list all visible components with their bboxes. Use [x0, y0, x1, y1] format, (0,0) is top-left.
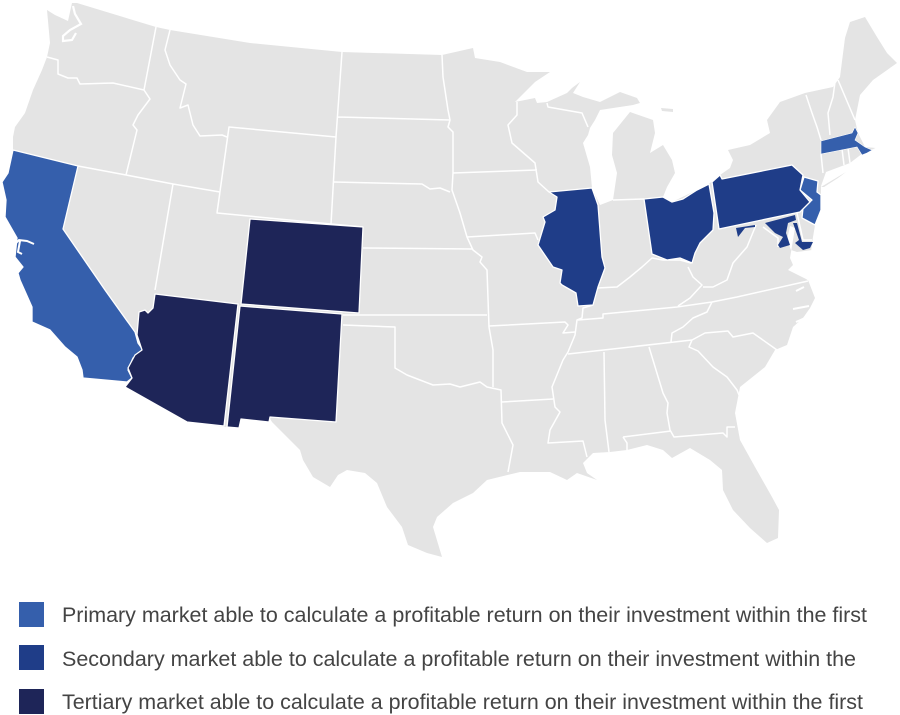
tertiary market: Arizona: [125, 294, 238, 426]
North Carolina sounds: [793, 287, 809, 322]
label: primary: Primary market able to calculate a profitable return on their investment within the first: [62, 604, 867, 627]
secondary market: Illinois: [538, 188, 605, 306]
legend item: secondary market: [19, 645, 856, 671]
legend: [19, 602, 867, 714]
swatch: tertiary: [19, 689, 44, 714]
Long Island: [821, 172, 846, 187]
legend item: tertiary market: [19, 689, 863, 714]
map of the United States: [2, 3, 897, 557]
tertiary market: Colorado: [241, 219, 363, 313]
legend item: primary market: [19, 602, 867, 627]
land silhouette: [2, 3, 897, 557]
swatch: secondary: [19, 645, 44, 670]
Drummond Island: [661, 108, 673, 112]
primary market: New Jersey: [800, 177, 821, 225]
primary market: San Francisco Bay inlet: [14, 240, 34, 254]
state borders: [47, 27, 855, 472]
swatch: primary: [19, 602, 44, 627]
secondary market: Maryland: [736, 215, 813, 250]
primary market: California: [2, 150, 143, 382]
label: tertiary: Tertiary market able to calculate a profitable return on their investment within the first: [62, 691, 863, 714]
secondary market: Ohio: [644, 184, 714, 263]
label: secondary: Secondary market able to calculate a profitable return on their investment within the: [62, 648, 856, 671]
Puget Sound inlet: [63, 6, 81, 41]
secondary market: Pennsylvania: [712, 165, 810, 229]
tertiary market: New Mexico: [227, 306, 342, 428]
primary market: Massachusetts: [821, 127, 876, 155]
Chesapeake and Virginia coast inlets: [787, 226, 812, 283]
